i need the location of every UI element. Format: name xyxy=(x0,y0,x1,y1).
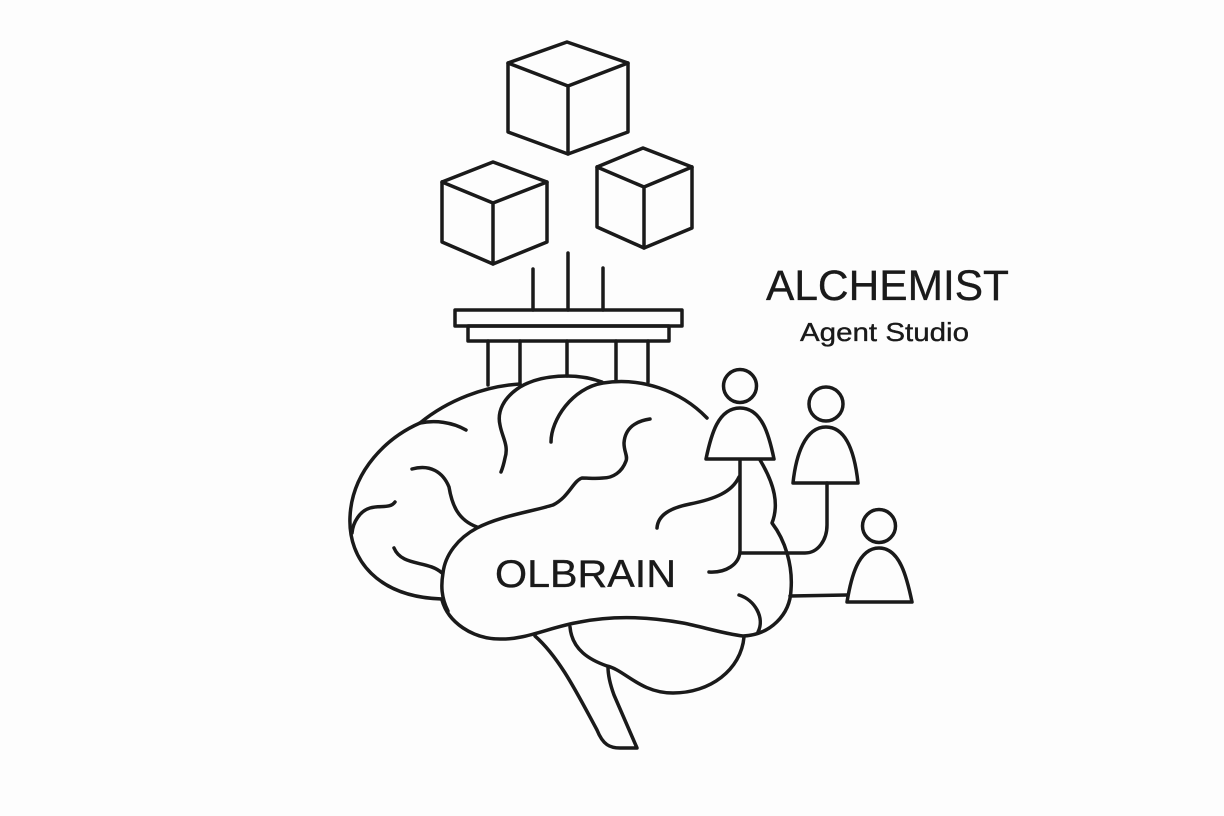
central sulcus xyxy=(442,419,650,611)
connector lines from brain to agents xyxy=(709,460,847,596)
icon: large top cube xyxy=(508,42,628,154)
cerebellum xyxy=(570,627,744,693)
left lobe outline xyxy=(350,384,520,599)
subtitle: Agent Studio: Agent Studio xyxy=(800,317,969,347)
brain label: OLBRAIN xyxy=(495,553,676,596)
title: ALCHEMIST: ALCHEMIST xyxy=(766,262,1009,310)
platform connecting cubes to brain xyxy=(455,310,682,385)
left branch folds xyxy=(352,502,395,533)
icon: agent person 1 xyxy=(706,370,774,459)
temporal lobe lower edge xyxy=(442,460,791,639)
icon: agent person 3 xyxy=(847,510,912,602)
icon: left cube xyxy=(442,162,547,264)
icon: right cube xyxy=(597,148,692,248)
brain outline xyxy=(350,376,791,748)
antenna lines above platform xyxy=(533,253,603,310)
second gyrus xyxy=(499,376,602,472)
icon: agent person 2 xyxy=(793,387,858,483)
right inner folds xyxy=(739,595,760,632)
brainstem xyxy=(535,636,637,748)
third gyrus and top right outline xyxy=(551,382,707,442)
